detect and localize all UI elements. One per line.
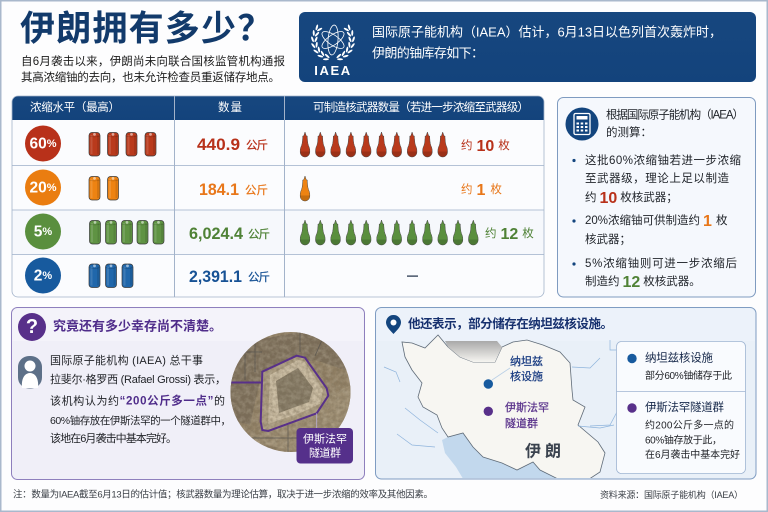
icon: person [18,356,42,388]
Caspian shadow [445,341,502,362]
calculation intro: 根据国际原子能机构（IAEA） [606,108,744,122]
row: 20% [25,170,502,206]
bomb 1 [300,176,310,201]
cylinders 20% [89,176,118,200]
panel heading: 他还表示，部分储存在纳坦兹核设施。 [408,316,613,331]
cylinders 60% [89,132,156,156]
icon: calculator [566,108,598,140]
bullet: 20%: 20%浓缩铀可供制造约1 枚 [585,212,728,230]
Grossi statement text: 该机构认为约“200公斤多一点”的 [50,394,225,408]
amount 440.9 [197,136,268,154]
amount 184.1 [199,181,268,199]
badge 60% [25,126,61,162]
icon: question mark: ? [26,316,38,338]
badge 2% [25,258,61,294]
bombs 12 [300,220,478,245]
icon: IAEA logo: IAEA [314,63,352,78]
amount 6,024.4: 公斤 [248,228,270,241]
badge 5%: 5% [34,224,52,240]
row: 2% [25,258,418,294]
panel: IAEA estimate banner [299,12,756,82]
map legend [616,342,746,474]
panel: survival unclear [12,308,364,480]
badge 60%: 60% [29,136,57,152]
marker: Isfahan [484,400,549,430]
table header: 可制造核武器数量（若进一步浓缩至武器级） [313,100,529,114]
intro text: 其高浓缩铀的去向，也未允许检查员重返储存地点。 [21,70,280,84]
marker: Isfahan: 伊斯法罕 [505,400,549,414]
count about 1: 约1 枚 [461,182,502,198]
Grossi statement text: 60%铀存放在伊斯法罕的一个隧道群中， [50,414,231,427]
legend: Isfahan: 约200公斤多一点的 [645,418,734,432]
panel heading: 究竟还有多少幸存尚不清楚。 [53,318,222,334]
table header: 浓缩水平（最高） [30,100,120,114]
panel: uranium stockpile table [12,96,544,297]
cylinders 5% [90,220,164,244]
label: Isfahan tunnels: 伊斯法罕 [303,432,347,446]
calculation intro: 的测算： [606,125,652,139]
icon: IAEA logo [310,24,356,78]
amount 2,391.1: 2,391.1 [189,268,242,286]
marker: Natanz: 核设施 [510,369,543,383]
bullet: 5% [572,256,737,290]
Persian Gulf [442,433,556,482]
legend: Natanz: 纳坦兹核设施 [645,350,714,364]
amount 440.9: 公斤 [246,139,268,152]
badge 2%: 2% [34,268,52,284]
marker: Natanz: 纳坦兹 [510,354,543,368]
icon: location pin [386,315,401,334]
bullet: 5%: 制造约12 枚核武器。 [585,274,701,290]
count about 10: 约10 枚 [461,138,510,154]
bullet: 60%: 约10 枚核武器； [585,190,678,206]
bullet: 5%: 5%浓缩铀则可进一步浓缩后 [585,256,737,270]
amount 440.9: 440.9 [197,136,240,154]
bullet: 20% [572,212,728,246]
source: 资料来源：国际原子能机构（IAEA） [600,489,743,500]
amount 6,024.4 [189,225,270,243]
bullet: 60%: 这批60%浓缩铀若进一步浓缩 [585,153,741,167]
icon: question mark [18,313,46,341]
banner text: 国际原子能机构（IAEA）估计，6月13日以色列首次轰炸时， [372,24,722,40]
panel: IAEA calculation [558,98,756,297]
count about 12: 约12 枚 [485,226,534,242]
panel: Natanz map [376,308,756,482]
table header: 数量 [218,100,242,114]
intro text [21,54,286,84]
amount 6,024.4: 6,024.4 [189,225,244,243]
table header [12,96,544,120]
satellite image of Isfahan tunnels [230,332,353,464]
label: Isfahan tunnels: 隧道群 [309,446,341,460]
Grossi statement text: 拉斐尔·格罗西 (Rafael Grossi) 表示， [50,372,226,386]
legend: Natanz [627,350,732,382]
intro text: 自6月袭击以来，伊朗尚未向联合国核监管机构通报 [21,54,286,68]
legend: Isfahan: 60%铀存放于此， [645,434,722,446]
badge 5% [25,214,61,250]
Grossi statement text: 该地在6月袭击中基本完好。 [50,431,177,445]
label: Isfahan tunnels [296,428,353,464]
amount 2,391.1 [189,268,270,286]
marker: Natanz [484,354,543,389]
badge 20%: 20% [29,180,57,196]
bullet: 20%: 核武器； [585,232,631,246]
Iran outline [402,335,605,478]
map label Iran: 伊 朗 [525,442,561,460]
badge 20% [25,170,61,206]
map of Iran [384,335,622,482]
bullet: 60% [572,153,741,206]
amount 184.1: 184.1 [199,181,239,199]
legend: Isfahan: 在6月袭击中基本完好 [645,448,740,461]
legend: Natanz: 部分60%铀储存于此 [645,369,732,382]
footnote: 注：数量为IAEA截至6月13日的估计值；核武器数量为理论估算，取决于进一步浓缩的效率及其他因素。 [13,488,433,500]
marker: Isfahan: 隧道群 [505,416,538,430]
row: 5% [25,214,534,250]
Grossi statement text [50,353,231,445]
no weapon dash [407,276,418,277]
bombs 10 [300,132,448,157]
rivers [384,340,622,447]
calculation intro [606,108,744,139]
legend: Isfahan: 伊斯法罕隧道群 [645,400,724,414]
Grossi statement text: 国际原子能机构 (IAEA) 总干事 [50,353,203,367]
row: 60% [25,126,510,162]
banner text [372,24,722,60]
banner text: 伊朗的铀库存如下： [372,46,484,60]
amount 2,391.1: 公斤 [248,271,270,284]
amount 184.1: 公斤 [245,184,268,197]
bullet: 60%: 至武器级，理论上足以制造 [585,171,730,185]
title: 伊朗拥有多少？ [20,10,273,48]
cylinders 2% [89,264,133,288]
legend: Isfahan [627,400,740,461]
